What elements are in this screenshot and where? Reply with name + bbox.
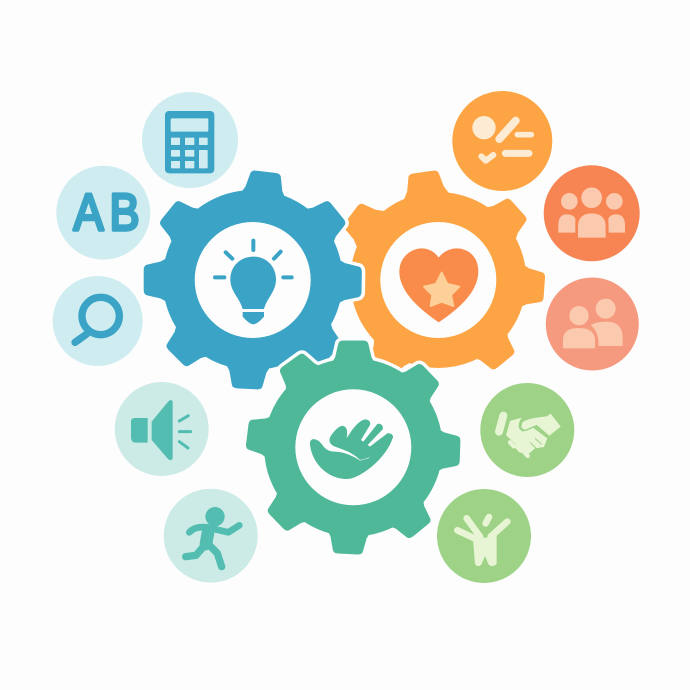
icon: checklist — [472, 116, 531, 161]
badge: group of three — [544, 165, 640, 261]
icon: two people — [563, 299, 623, 348]
icon: three people — [558, 187, 625, 238]
badge: calculator — [142, 92, 238, 188]
badge: checklist — [452, 91, 552, 191]
badge: magnifying glass — [53, 276, 143, 366]
text: AB — [74, 184, 140, 242]
badge: AB letters — [56, 166, 150, 260]
icon: handshake — [499, 413, 562, 456]
icon: magnifier — [75, 297, 119, 342]
icon: running person — [186, 507, 239, 567]
badge: two people — [546, 278, 639, 370]
icon: heart with star — [399, 248, 478, 322]
icon: cheering person — [457, 517, 507, 566]
icon: open hand — [310, 419, 393, 479]
icon: calculator — [165, 111, 214, 173]
icon: speaker — [131, 400, 191, 460]
gear: orange — [337, 169, 546, 382]
badge: speaker — [115, 382, 209, 476]
badge: runner — [164, 489, 258, 583]
gear: blue — [144, 169, 362, 390]
text: AB: A — [74, 184, 104, 242]
text: AB: B — [110, 184, 140, 242]
icon: light bulb — [215, 241, 292, 324]
badge: cheering person — [437, 489, 531, 583]
gear: green — [245, 340, 461, 555]
badge: handshake — [480, 383, 574, 477]
